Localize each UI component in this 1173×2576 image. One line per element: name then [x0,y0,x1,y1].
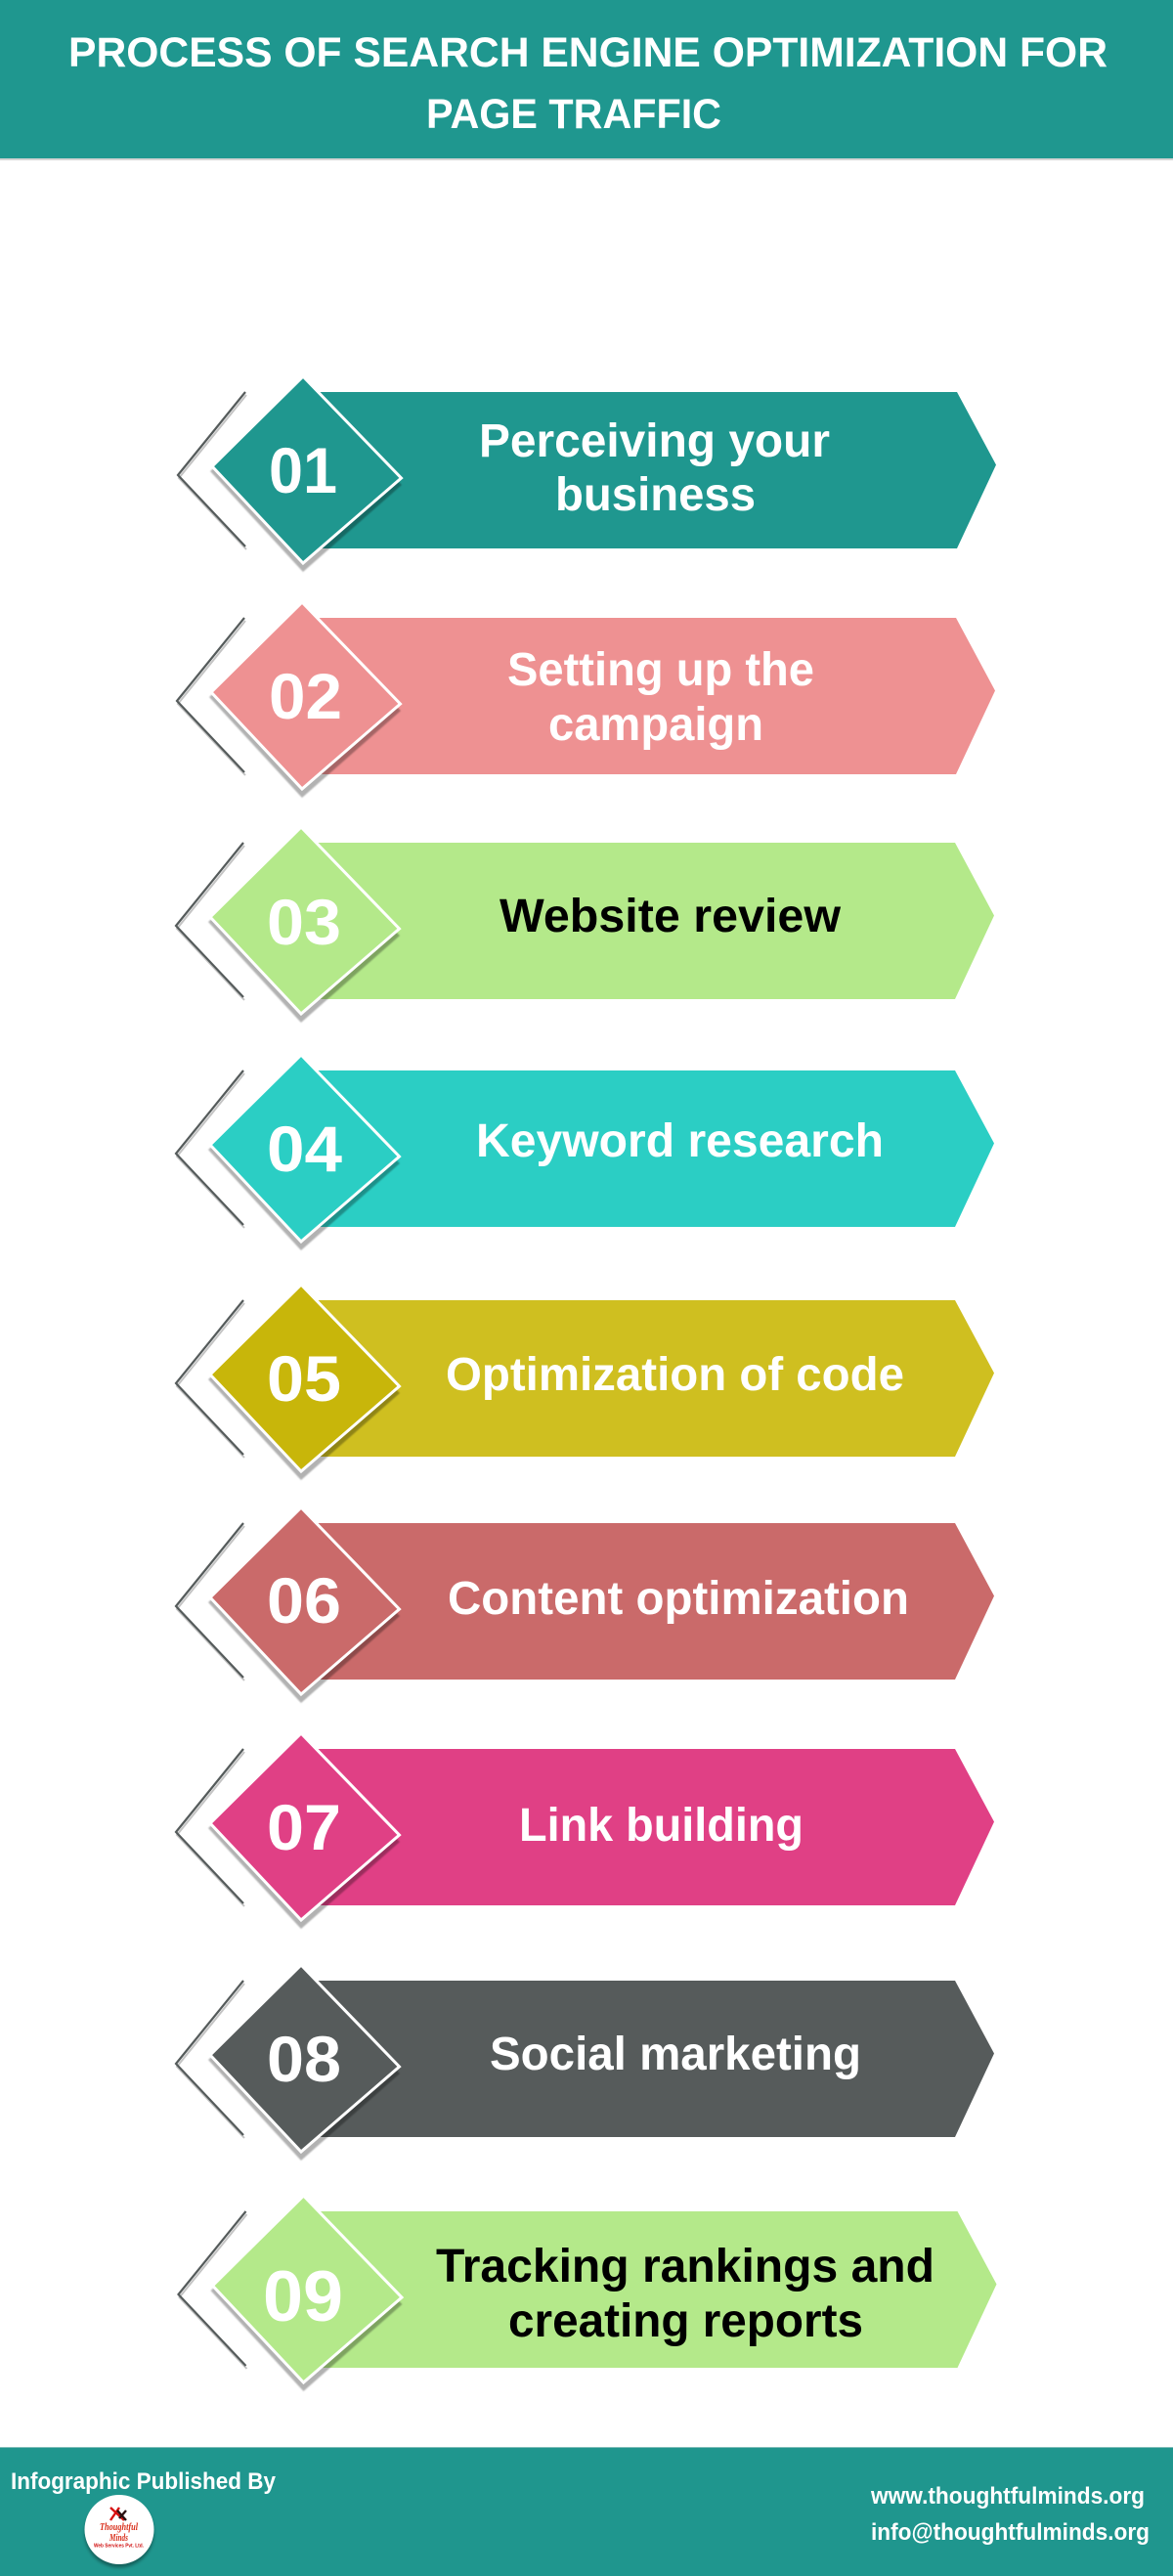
title banner [0,0,1173,160]
step 01 shapes [178,376,996,572]
logo wordmark: Thoughtful [100,2522,138,2533]
step 02 shapes [177,602,995,798]
logo wordmark line 2: Minds [109,2533,128,2544]
step 04 label: Keyword research [476,1115,884,1167]
step 07 number: 07 [267,1791,341,1863]
title text line 2: PAGE TRAFFIC [426,91,721,138]
step 01 number: 01 [269,434,337,506]
step 03 shapes [176,827,994,1023]
step 06 number: 06 [267,1564,341,1637]
step 09 label line 2: creating reports [508,2295,863,2347]
step 05 number: 05 [267,1342,341,1415]
step 02 label line 2: campaign [548,699,763,751]
step 01 label line 2: business [555,469,756,521]
email address: info@thoughtfulminds.org [871,2519,1150,2546]
step 04 shapes [176,1055,994,1250]
website address: www.thoughtfulminds.org [870,2483,1145,2510]
step 09 shapes [178,2196,997,2391]
step 07 label: Link building [519,1800,804,1852]
step 07 shapes [176,1733,994,1929]
step 02 number: 02 [269,660,342,732]
step 03 number: 03 [267,886,341,958]
step 08 shapes [176,1965,994,2161]
step 02 label: Setting up the [507,644,814,696]
logo badge [84,2495,154,2567]
panel: step 01 [178,376,996,572]
panel: step 09 [178,2196,997,2391]
title text line 1: PROCESS OF SEARCH ENGINE OPTIMIZATION FOR [68,29,1108,76]
panel: step 08 [176,1965,994,2161]
logo icon [110,2508,126,2520]
panel: step 03 [176,827,994,1023]
step 09 label: Tracking rankings and [436,2241,934,2292]
footer band [0,2447,1173,2576]
panel: step 07 [176,1733,994,1929]
panel: step 06 [176,1507,994,1703]
step 01 label: Perceiving your [479,415,830,467]
step 05 label: Optimization of code [446,1349,904,1401]
step 04 number: 04 [267,1113,342,1185]
publisher heading: Infographic Published By [11,2468,277,2495]
step 03 label: Website review [500,891,842,942]
step 09 number: 09 [263,2257,343,2336]
panel: step 02 [177,602,995,798]
logo tagline: Web Services Pvt. Ltd. [94,2544,144,2550]
step 06 shapes [176,1507,994,1703]
panel: step 05 [176,1285,994,1480]
step 05 shapes [176,1285,994,1480]
step 06 label: Content optimization [448,1573,909,1625]
step 08 label: Social marketing [490,2029,861,2080]
panel: step 04 [176,1055,994,1250]
step 08 number: 08 [267,2023,341,2095]
